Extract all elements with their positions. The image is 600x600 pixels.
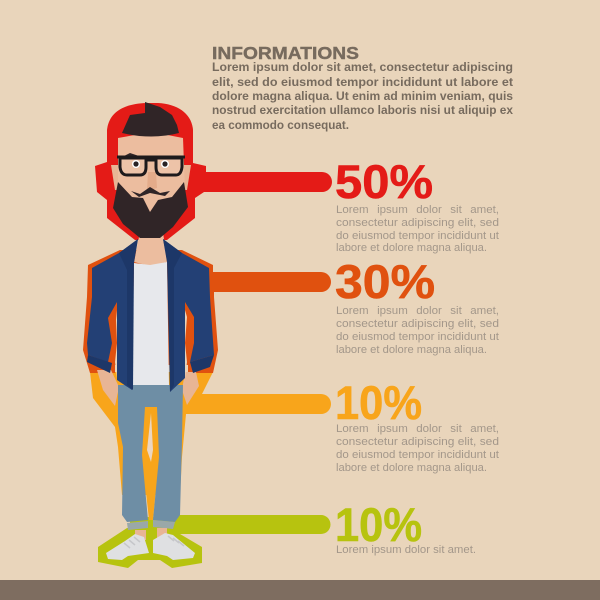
ankles — [135, 528, 167, 540]
eyes — [132, 160, 169, 168]
beard — [113, 182, 188, 238]
intro text block: dolore magna aliqua. Ut enim ad minim veniam, quis — [212, 91, 513, 103]
description — [336, 204, 499, 254]
orange outline around torso with bar — [83, 250, 331, 373]
stat 10% orange: 10% — [335, 376, 422, 429]
jacket shading — [87, 239, 214, 392]
description: Lorem ipsum dolor sit amet, — [336, 305, 499, 317]
intro text block — [212, 62, 514, 132]
stat 50% — [335, 155, 499, 254]
hair — [122, 102, 179, 136]
description: Lorem ipsum dolor sit amet, — [336, 204, 499, 216]
description — [336, 305, 499, 356]
description: consectetur adipiscing elit, sed — [336, 318, 499, 330]
intro text block: ea commodo consequat. — [212, 120, 349, 132]
cream slit — [147, 413, 153, 462]
glasses — [117, 157, 185, 175]
stat 10% green — [335, 498, 476, 556]
white t-shirt — [132, 262, 169, 392]
description: labore et dolore magna aliqua. — [336, 344, 487, 356]
description: Lorem ipsum dolor sit amet, — [336, 423, 499, 435]
jean cuffs — [127, 520, 175, 530]
description — [336, 423, 499, 474]
stat 10% green: 10% — [335, 498, 422, 551]
intro text block: Lorem ipsum dolor sit amet, consectetur adipiscing — [212, 62, 513, 74]
stat 50%: 50% — [335, 155, 433, 208]
intro text block: elit, sed do eiusmod tempor incididunt ut labore et — [212, 77, 513, 89]
yellow outline around legs with bar — [90, 372, 331, 495]
character — [87, 102, 214, 560]
eyebrows — [122, 153, 178, 161]
nose shade — [147, 172, 157, 190]
jacket — [87, 239, 214, 392]
inner leg gap — [142, 405, 159, 520]
jeans — [118, 385, 183, 522]
description: labore et dolore magna aliqua. — [336, 242, 487, 254]
shoes — [106, 533, 195, 560]
description: consectetur adipiscing elit, sed — [336, 436, 499, 448]
intro text block: nostrud exercitation ullamco laboris nisi ut aliquip ex — [212, 105, 514, 117]
description: labore et dolore magna aliqua. — [336, 462, 487, 474]
cream slivers beside jacket — [115, 310, 187, 378]
hands — [97, 370, 199, 406]
face — [118, 132, 185, 225]
shoelaces — [124, 536, 184, 548]
stat 30% — [335, 255, 499, 356]
stat 30%: 30% — [335, 255, 435, 308]
bottom band — [0, 580, 600, 600]
moustache — [131, 187, 170, 197]
red outline around head with bar — [95, 103, 332, 240]
description: Lorem ipsum dolor sit amet. — [336, 544, 476, 556]
stat 10% orange — [335, 376, 499, 474]
ears — [111, 165, 191, 190]
description: do eiusmod tempor incididunt ut — [336, 449, 499, 461]
green outline around feet with bar — [98, 515, 330, 568]
description: do eiusmod tempor incididunt ut — [336, 331, 499, 343]
description: do eiusmod tempor incididunt ut — [336, 230, 499, 242]
neck — [134, 232, 167, 266]
title: INFORMATIONS — [212, 43, 359, 63]
description: consectetur adipiscing elit, sed — [336, 217, 499, 229]
